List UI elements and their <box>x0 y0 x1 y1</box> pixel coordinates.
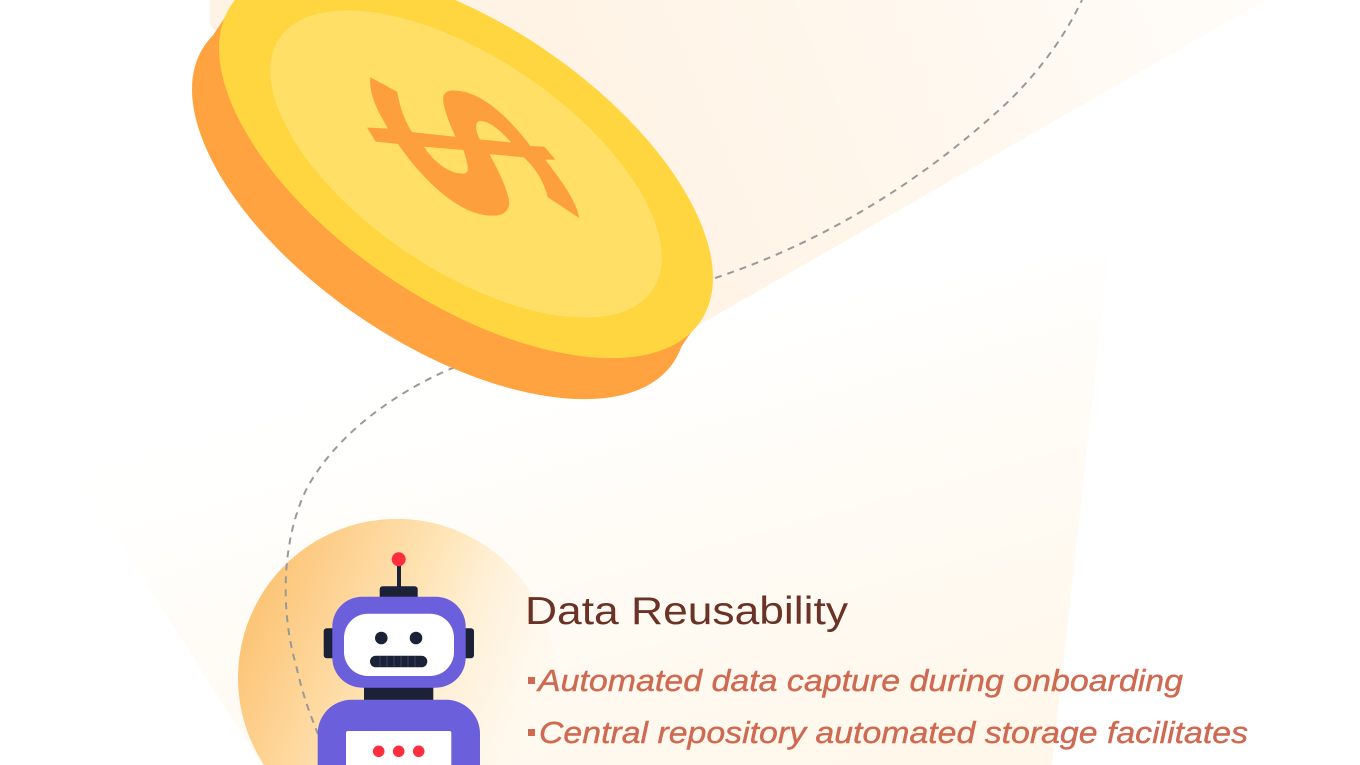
dashed path lower <box>286 367 455 734</box>
face screen <box>344 614 454 676</box>
bullet 1 marker <box>528 677 535 684</box>
head <box>332 597 466 688</box>
right eye <box>410 632 422 644</box>
bullet 2 marker <box>528 729 535 736</box>
heading: Data Reusability <box>525 590 849 633</box>
dashed path upper <box>715 0 1082 278</box>
coin top face <box>154 0 778 436</box>
bullet 1 text: Automated data capture during onboarding <box>536 663 1183 698</box>
icon: robot <box>318 552 480 765</box>
glowing circle behind robot <box>238 519 556 765</box>
upper light beam <box>210 0 1265 328</box>
antenna ball <box>392 552 406 566</box>
coin side <box>127 0 751 477</box>
dollar sign <box>368 78 578 217</box>
antenna stick <box>397 562 401 588</box>
coin inner face <box>220 0 712 378</box>
bullet list <box>528 663 1248 750</box>
lower light beam <box>80 250 1109 765</box>
bullet 2 text: Central repository automated storage facilitates <box>539 715 1248 750</box>
body <box>318 700 480 765</box>
left eye <box>375 632 388 644</box>
chest lights <box>373 746 425 757</box>
chest panel <box>346 731 451 765</box>
head cap <box>380 586 418 600</box>
icon: coin <box>127 0 778 477</box>
right ear <box>462 628 474 658</box>
mouth <box>370 656 427 667</box>
left ear <box>324 628 336 658</box>
neck <box>364 685 433 703</box>
